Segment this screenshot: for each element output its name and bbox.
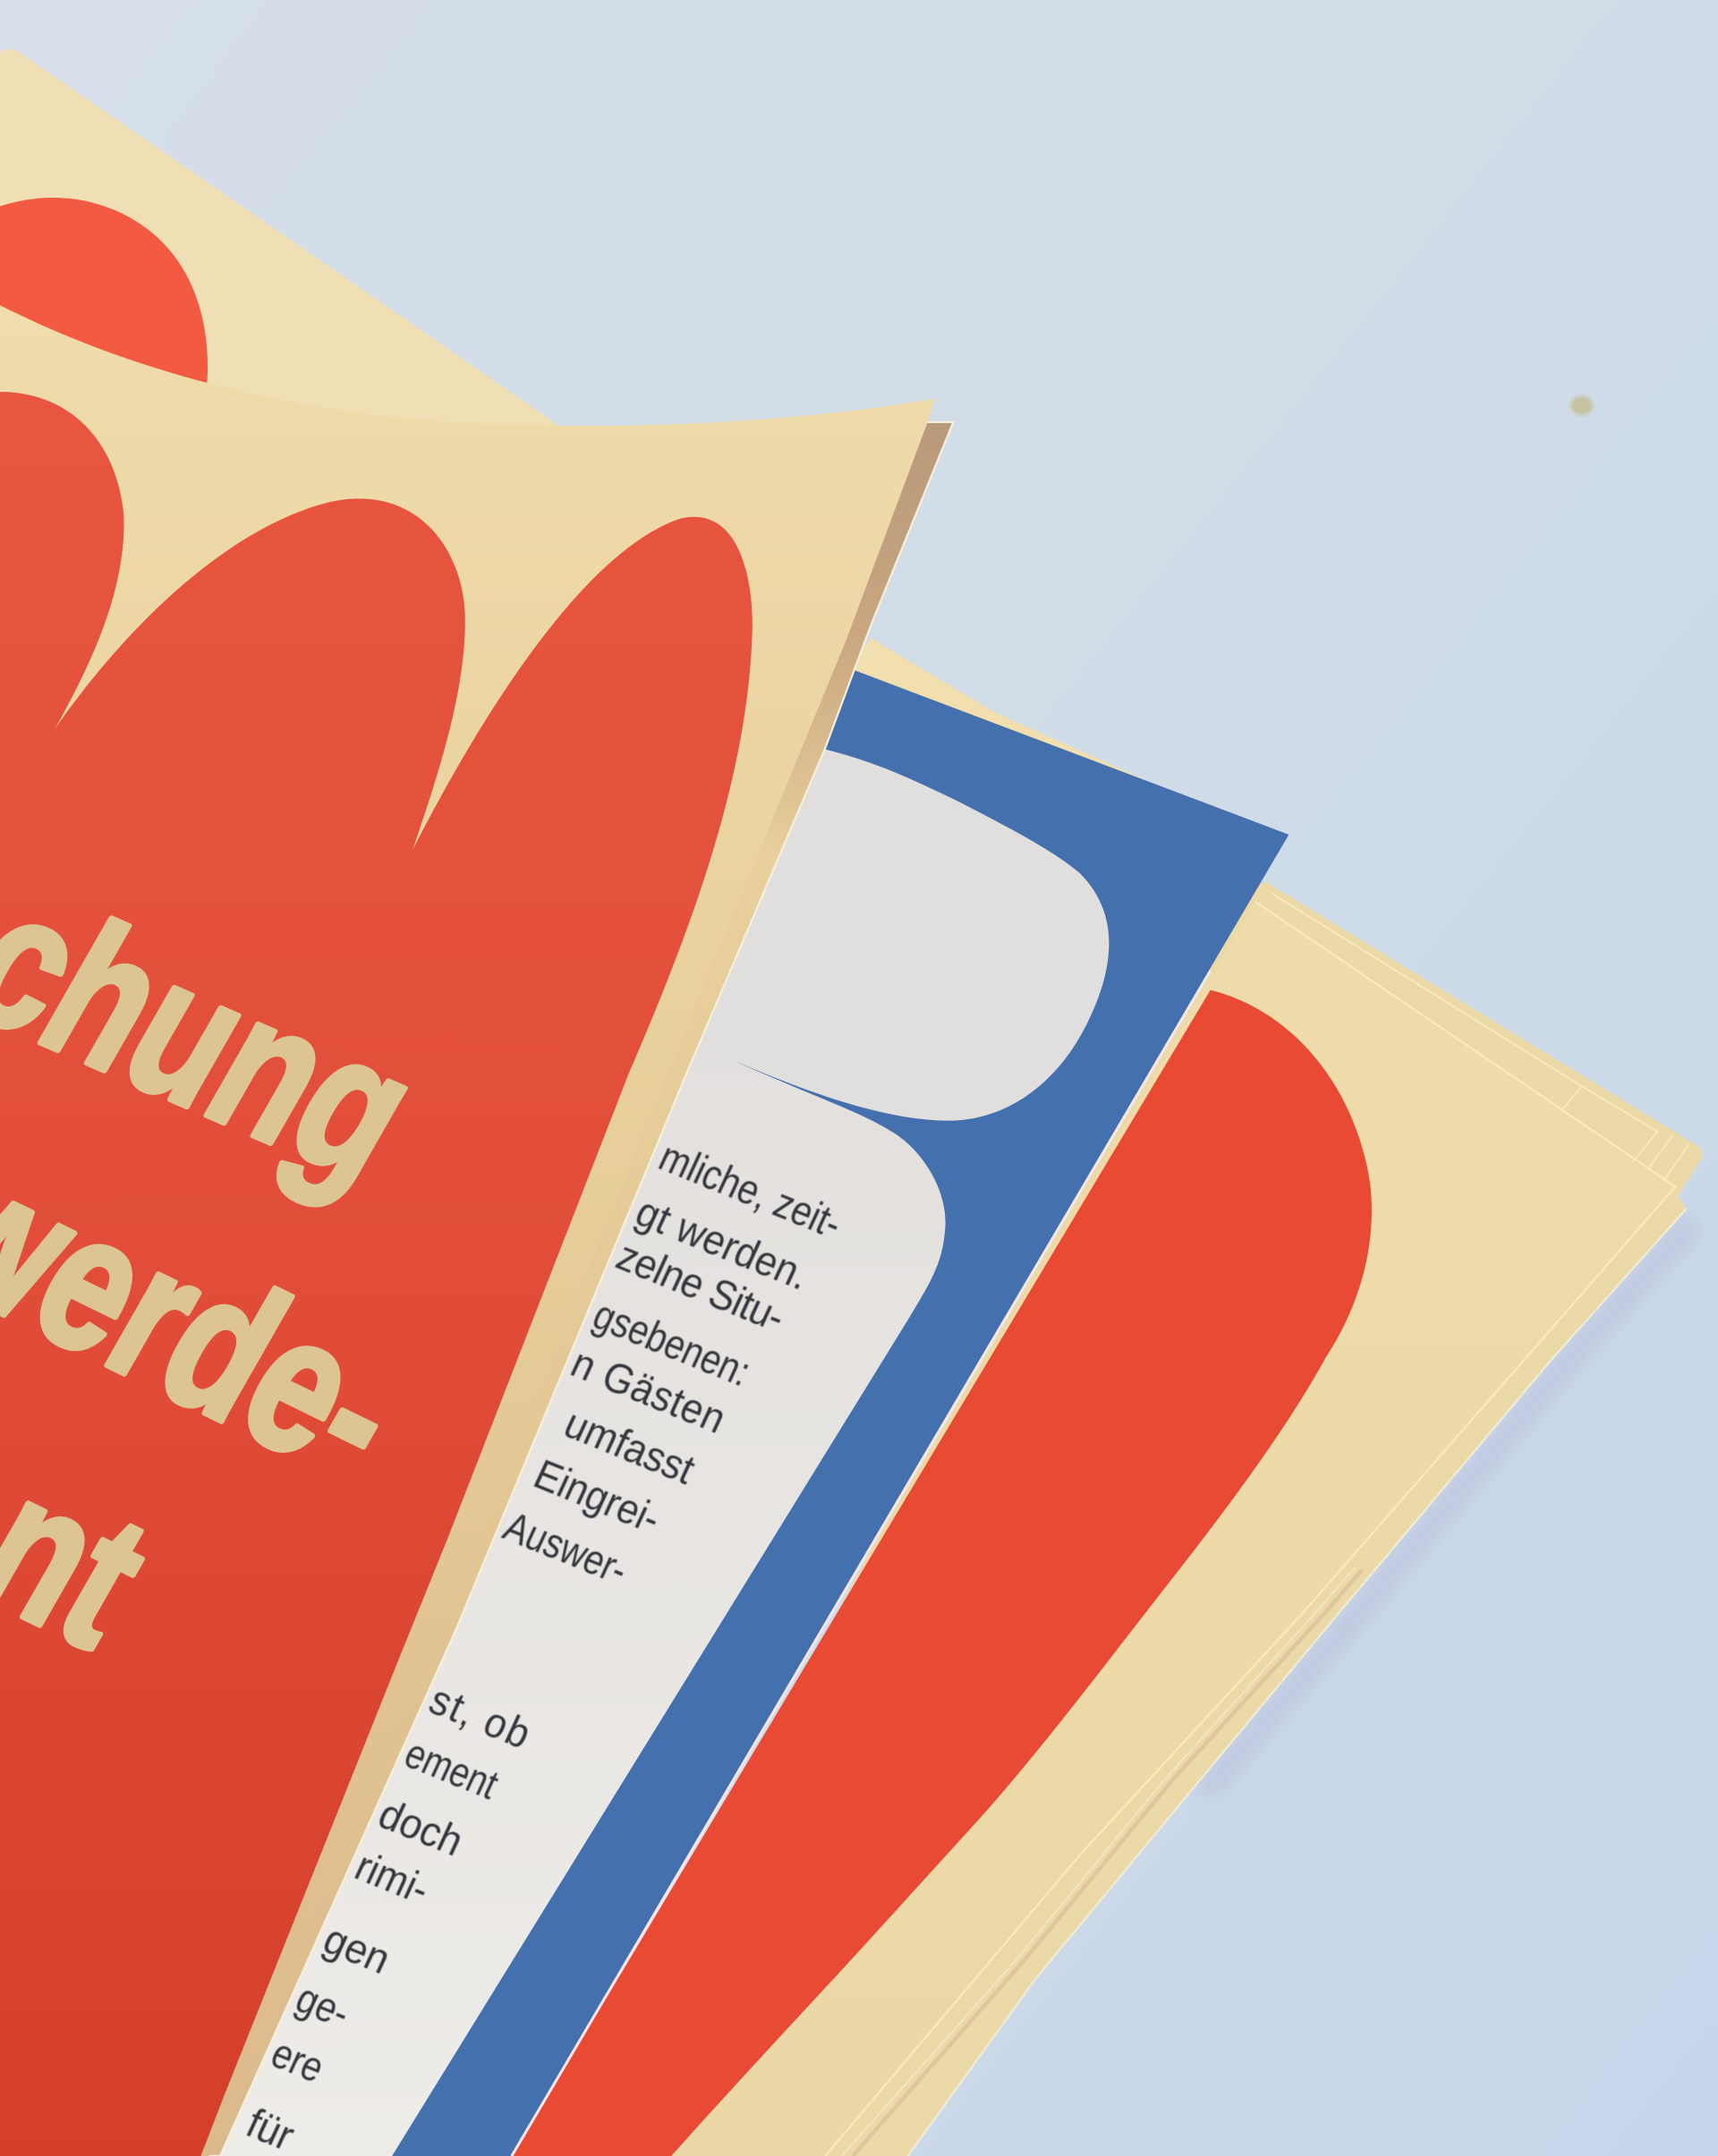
- front sheet with headline: [0, 305, 935, 2156]
- tan stripe between layers: [853, 1570, 1362, 2156]
- bottom layer of stack: [550, 881, 1703, 2156]
- top layer of stack: [523, 902, 1675, 2156]
- body text block lower: ere: [264, 2029, 331, 2092]
- body text block upper: gsebenen:: [586, 1291, 758, 1396]
- stack edge highlight: [825, 902, 1675, 2156]
- surface speck: [1571, 396, 1593, 415]
- red scalloped shape: [0, 392, 753, 2156]
- lower white panel with text: [138, 1017, 946, 2156]
- body text block lower: rimi-: [348, 1842, 437, 1914]
- body text block lower: st, ob: [422, 1676, 538, 1758]
- body text block upper: zelne Situ-: [609, 1232, 793, 1341]
- back sheet: top left with red circle: [0, 49, 963, 963]
- body text block upper: umfasst: [557, 1399, 702, 1493]
- white sheet edge: [512, 971, 1211, 2156]
- lower cream stack: [523, 638, 1703, 2156]
- body text block lower: gen: [317, 1914, 398, 1983]
- upper white panel: [578, 715, 1109, 1121]
- body text block upper: gt werden.: [629, 1187, 817, 1299]
- red shape on cream sheet: [512, 990, 1372, 2156]
- blue sheet: [207, 670, 1288, 2156]
- pale layer line: [842, 1567, 1355, 2156]
- headline text: [0, 818, 451, 1688]
- body text block upper: mliche, zeit-: [652, 1133, 849, 1248]
- body text block lower: ge-: [289, 1974, 358, 2037]
- second front sheet edge: [138, 422, 953, 2156]
- corner fold lines: [1272, 894, 1689, 1180]
- body text block lower: ement: [397, 1729, 506, 1808]
- body text block upper: Auswer-: [497, 1502, 635, 1593]
- body text block upper: n Gästen: [565, 1338, 734, 1442]
- outer edge highlight: [908, 1209, 1687, 2156]
- body text block upper: [497, 1133, 849, 1593]
- body text block lower: doch: [371, 1790, 471, 1865]
- body text block lower: [240, 1676, 538, 2156]
- red semicircle on back sheet: [0, 198, 208, 392]
- cream tip above blue sheet: [825, 638, 1199, 825]
- shadow of the paper stack: [1203, 1221, 1695, 1795]
- body text block upper: Eingrei-: [527, 1450, 668, 1542]
